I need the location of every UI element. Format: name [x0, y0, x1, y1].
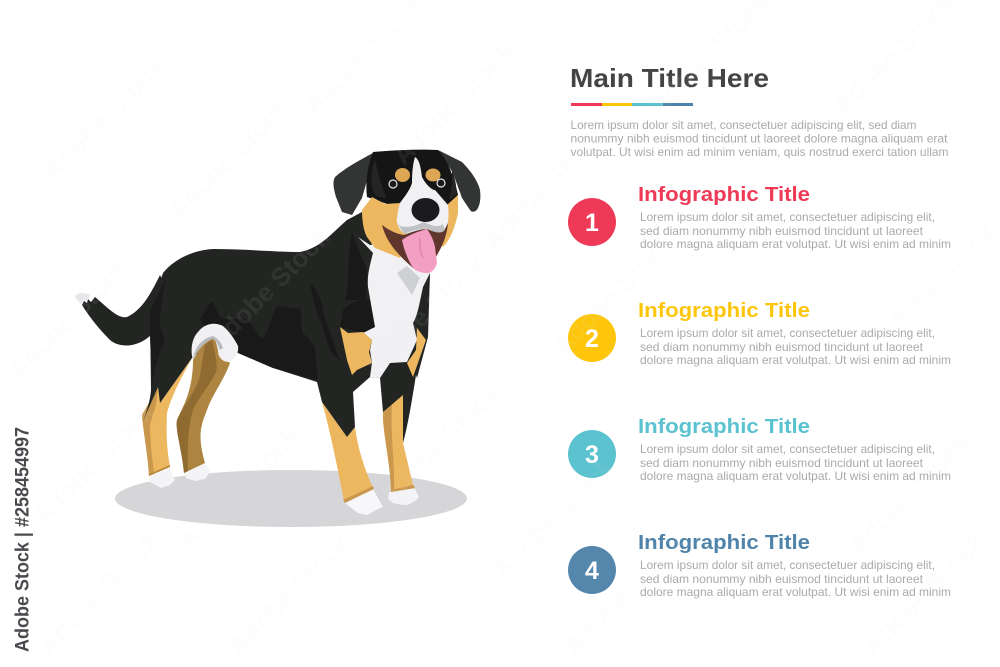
near hind leg — [142, 358, 192, 476]
far front paw — [388, 487, 419, 505]
watermark pattern: Adobe Stock — [32, 526, 166, 660]
tan chest patch — [407, 328, 426, 377]
thigh shading — [193, 336, 223, 360]
item 3 — [568, 415, 951, 483]
number badge 2 — [568, 314, 616, 362]
body shading: shoulder — [310, 233, 376, 362]
mouth — [382, 223, 448, 273]
far front leg — [383, 395, 415, 492]
item 1 — [568, 183, 951, 251]
watermark pattern: Adobe Stock — [37, 51, 171, 185]
body 2: sed diam nonummy nibh euismod tincidunt ut laoreet — [640, 340, 924, 354]
body 3: sed diam nonummy nibh euismod tincidunt ut laoreet — [640, 456, 924, 470]
eyebrows — [395, 168, 410, 182]
watermark pattern: Adobe Stock — [842, 426, 976, 560]
white thigh — [192, 324, 238, 362]
body 4: Lorem ipsum dolor sit amet, consectetuer adipiscing elit, — [640, 558, 935, 572]
body 4 — [640, 558, 951, 599]
body 3: dolore magna aliquam erat volutpat. Ut wisi enim ad minim — [640, 469, 951, 483]
number badge 1 — [568, 198, 616, 246]
tan cheeks — [362, 195, 458, 258]
watermark pattern: Adobe Stock — [372, 376, 506, 510]
face shading — [371, 160, 456, 200]
right ear — [438, 150, 480, 212]
near hind paw — [149, 468, 175, 488]
number 3: 3 — [585, 441, 599, 469]
face mask — [366, 150, 458, 220]
body 2: Lorem ipsum dolor sit amet, consectetuer adipiscing elit, — [640, 326, 935, 340]
body 1 — [640, 210, 951, 251]
body shading: flank — [200, 302, 318, 380]
heading 1: Infographic Title — [638, 183, 810, 206]
heading 4: Infographic Title — [638, 531, 810, 554]
near front paw — [345, 489, 383, 515]
near front leg — [322, 402, 373, 501]
watermark pattern: Adobe Stock — [162, 91, 296, 225]
body 4: dolore magna aliquam erat volutpat. Ut wisi enim ad minim — [640, 585, 951, 599]
watermark pattern: Adobe Stock — [357, 246, 491, 380]
tail tip — [75, 293, 90, 304]
watermark pattern: Adobe Stock — [477, 121, 611, 255]
illustration: dog — [75, 150, 480, 515]
body 1: dolore magna aliquam erat volutpat. Ut wisi enim ad minim — [640, 237, 951, 251]
far hind paw — [184, 463, 210, 481]
body shading: left — [150, 275, 168, 387]
white blaze and muzzle — [397, 157, 449, 235]
number 1: 1 — [585, 209, 599, 237]
item 2 — [568, 299, 951, 367]
stock credit: Adobe Stock | #258454997 — [12, 427, 34, 652]
body 4: sed diam nonummy nibh euismod tincidunt ut laoreet — [640, 572, 924, 586]
watermark pattern: Adobe Stock — [557, 526, 691, 660]
intro text: nonummy nibh euismod tincidunt ut laoreet dolore magna aliquam erat — [570, 132, 948, 146]
title rule — [571, 103, 693, 106]
left ear — [333, 153, 373, 215]
watermark pattern: Adobe Stock — [387, 36, 521, 170]
watermark pattern: Adobe Stock — [202, 221, 336, 355]
watermark pattern: Adobe Stock — [547, 226, 681, 360]
tan shoulder patch — [340, 327, 372, 375]
watermark pattern: Adobe Stock — [222, 526, 356, 660]
muzzle shading — [397, 222, 445, 234]
number badge 3 — [568, 430, 616, 478]
chest shading — [397, 266, 420, 295]
body — [143, 212, 430, 443]
intro text — [570, 118, 948, 159]
watermark pattern: Adobe Stock — [27, 396, 161, 530]
heading 2: Infographic Title — [638, 299, 810, 322]
watermark pattern: Adobe Stock — [172, 421, 306, 555]
main title: Main Title Here — [570, 63, 769, 93]
tongue crease — [420, 238, 423, 258]
item 4 — [568, 531, 951, 599]
body 1: sed diam nonummy nibh euismod tincidunt ut laoreet — [640, 224, 924, 238]
watermark pattern: Adobe Stock — [857, 526, 991, 660]
far hind leg — [177, 338, 230, 473]
body 2 — [640, 326, 951, 367]
tail — [82, 275, 172, 346]
watermark pattern: Adobe Stock — [487, 451, 621, 585]
white chest — [358, 237, 430, 378]
number 4: 4 — [585, 557, 599, 585]
intro text: Lorem ipsum dolor sit amet, consectetuer adipiscing elit, sed diam — [570, 118, 916, 132]
number 2: 2 — [585, 325, 599, 353]
eyes — [389, 180, 397, 188]
body 1: Lorem ipsum dolor sit amet, consectetuer adipiscing elit, — [640, 210, 935, 224]
heading 3: Infographic Title — [638, 415, 810, 438]
watermark pattern: Adobe Stock — [2, 251, 136, 385]
body 3: Lorem ipsum dolor sit amet, consectetuer adipiscing elit, — [640, 442, 935, 456]
intro text: volutpat. Ut wisi enim ad minim veniam, quis nostrud exerci tation ullam — [570, 145, 948, 159]
ground shadow — [115, 470, 467, 527]
head — [333, 150, 480, 273]
tongue — [402, 229, 437, 273]
watermark pattern: Adobe Stock — [867, 216, 1000, 350]
number badge 4 — [568, 546, 616, 594]
body 2: dolore magna aliquam erat volutpat. Ut wisi enim ad minim — [640, 353, 951, 367]
body 3 — [640, 442, 951, 483]
nose — [412, 198, 440, 222]
